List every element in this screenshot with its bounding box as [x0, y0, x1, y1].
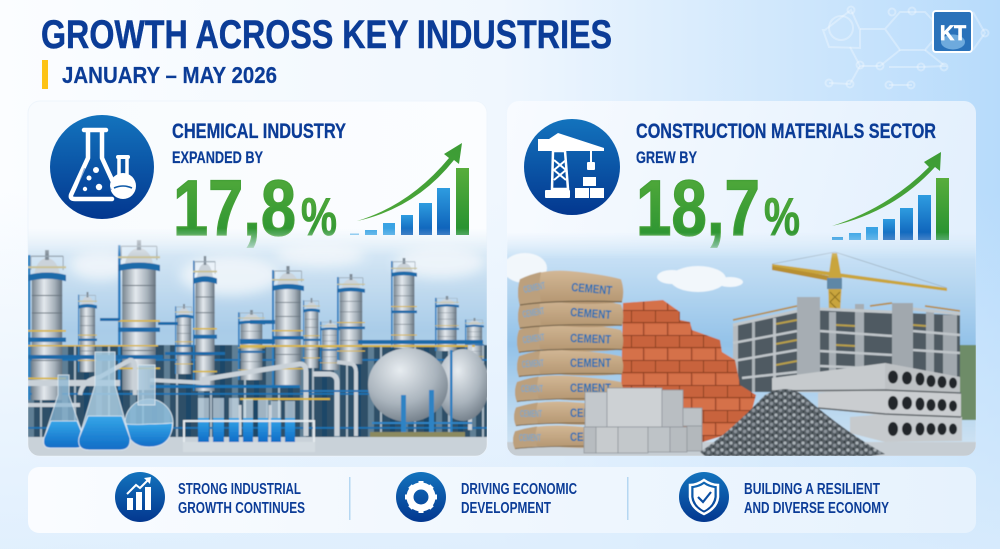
text: strong industrial growth continues: STRONG INDUSTRIAL	[178, 481, 301, 498]
takeaway: resilient economy	[679, 472, 889, 522]
title: GROWTH ACROSS KEY INDUSTRIES	[41, 13, 612, 57]
text: building a resilient and diverse economy: AND DIVERSE ECONOMY	[744, 500, 889, 517]
panel card	[28, 101, 487, 456]
icon: shield check	[679, 472, 729, 522]
photo: chemical plant	[28, 228, 489, 456]
cloud	[503, 253, 743, 292]
cement bags: CEMENT	[570, 406, 612, 420]
stat: 18,7%: %	[764, 188, 800, 247]
icon: flasks	[50, 115, 154, 219]
concrete blocks	[584, 388, 702, 453]
label: expanded by: EXPANDED BY	[172, 148, 263, 167]
text: building a resilient and diverse economy: BUILDING A RESILIENT	[744, 481, 880, 498]
icon: gear	[396, 472, 446, 522]
cement bags: CEMENT	[519, 433, 541, 444]
accent bar	[42, 60, 48, 89]
icon: growth chart	[115, 472, 165, 522]
cement bags: CEMENT	[523, 281, 546, 296]
heading: chemical industry: CHEMICAL INDUSTRY	[172, 120, 346, 143]
cement bags: CEMENT	[570, 430, 612, 444]
stat: 18,7%: 18,7	[636, 163, 760, 252]
cement bags: CEMENT	[522, 306, 545, 321]
decorative molecule pattern	[823, 6, 988, 88]
takeaway: industrial growth	[115, 472, 305, 522]
cement bags: CEMENT	[570, 356, 612, 370]
bar chart: growth	[350, 143, 469, 235]
panel: chemical industry	[28, 101, 489, 456]
cement bags: CEMENT	[521, 358, 544, 371]
brick pile	[620, 300, 756, 442]
laboratory flasks	[44, 352, 173, 450]
tower crane	[772, 252, 947, 313]
label: grew by: GREW BY	[636, 148, 697, 167]
takeaway: economic development	[396, 472, 577, 522]
cement bags: CEMENT	[570, 381, 612, 395]
panel card	[507, 101, 976, 456]
gravel pile	[700, 389, 885, 456]
stat: 17,8%: 17,8	[173, 163, 296, 252]
text: driving economic development: DRIVING ECONOMIC	[461, 481, 577, 498]
cement bags: CEMENT	[571, 280, 613, 298]
panel: construction materials	[503, 101, 976, 456]
text: strong industrial growth continues: GROWTH CONTINUES	[178, 500, 305, 517]
blue platforms and yellow railings	[28, 318, 483, 359]
cement bags	[513, 271, 623, 449]
text: driving economic development: DEVELOPMENT	[461, 500, 551, 517]
cement bags: CEMENT	[570, 305, 612, 322]
logo: KT: KT	[940, 22, 966, 45]
stat: 17,8%: %	[301, 188, 337, 247]
arrow: upward trend	[357, 143, 462, 221]
cement bags: CEMENT	[521, 384, 543, 395]
building frame	[733, 297, 960, 392]
icon: crane and blocks	[524, 119, 620, 215]
text: strong industrial growth continues	[178, 481, 305, 517]
photo: construction materials	[503, 232, 976, 456]
silver pipes	[28, 345, 470, 436]
concrete slabs	[772, 363, 962, 442]
subtitle: date range: JANUARY – MAY 2026	[62, 62, 277, 88]
arrow: upward trend	[832, 152, 941, 226]
test tube rack	[183, 398, 315, 452]
logo: KT	[933, 11, 972, 52]
band card	[28, 467, 976, 533]
text: building a resilient and diverse economy	[744, 481, 889, 517]
cement bags: CEMENT	[520, 409, 542, 420]
panel: key takeaways	[28, 467, 976, 533]
text: driving economic development	[461, 481, 577, 517]
cement bags: CEMENT	[522, 332, 545, 346]
cement bags: CEMENT	[570, 331, 612, 346]
bar chart: growth	[832, 152, 949, 240]
